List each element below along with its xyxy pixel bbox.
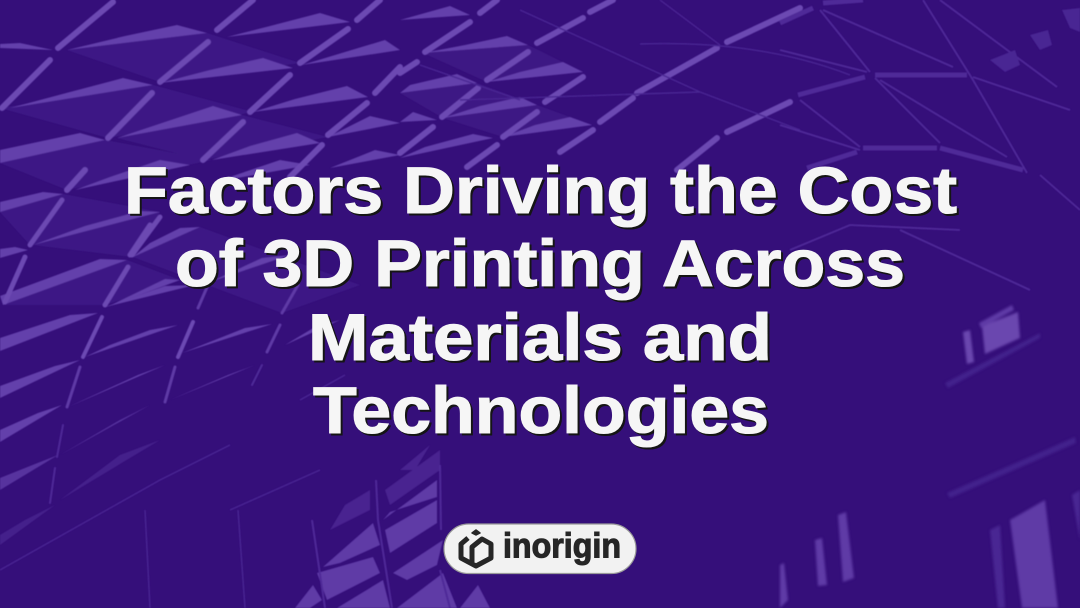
title: Materials and — [308, 300, 772, 374]
logo wordmark: inorigin — [503, 528, 621, 566]
ledges — [945, 333, 1076, 498]
title: Technologies — [313, 373, 769, 447]
upper window — [963, 305, 1020, 364]
logo pill background — [444, 524, 636, 574]
lower window — [1010, 500, 1058, 608]
struts — [2, 0, 800, 503]
narrow windows — [780, 512, 854, 608]
thin rib lines — [0, 0, 850, 608]
lower centre fan of ribs — [295, 445, 490, 608]
title: of 3D Printing Across — [175, 226, 905, 300]
logo badge — [444, 524, 636, 574]
logo icon: hexagonal cube — [461, 530, 491, 566]
right side arches — [780, 0, 1080, 290]
title — [124, 153, 957, 447]
wedges — [0, 6, 592, 545]
right side upper glints — [990, 8, 1080, 72]
building windows — [780, 305, 1080, 608]
soft shaded lattice cells — [0, 33, 592, 313]
title: Factors Driving the Cost — [124, 153, 957, 227]
